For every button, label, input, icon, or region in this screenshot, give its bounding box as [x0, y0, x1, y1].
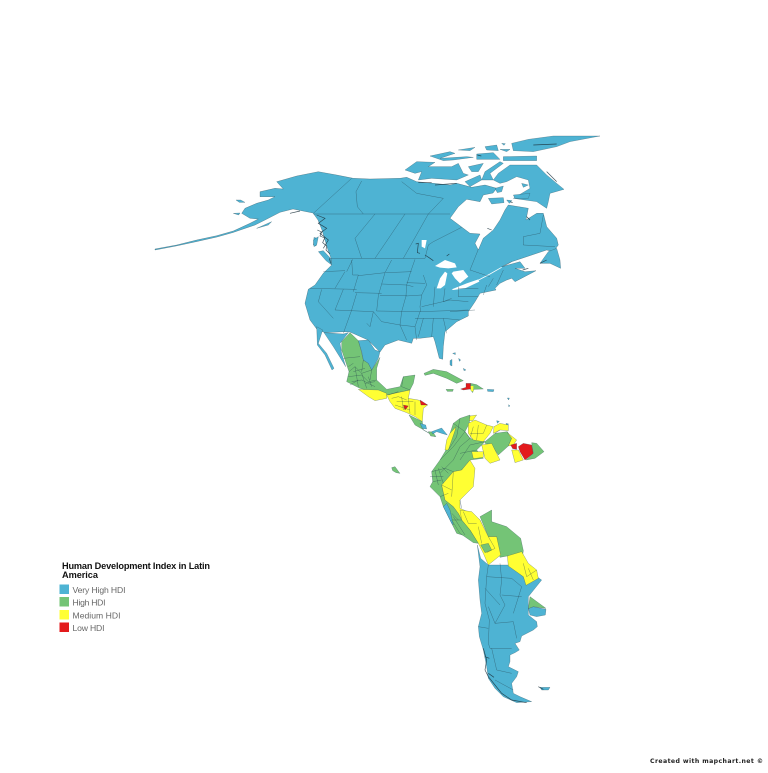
map: northern South America [430, 415, 544, 542]
Costa Rica very high HDI [420, 423, 427, 429]
Colombia Guajira yellow [469, 415, 477, 421]
Cuba [424, 369, 463, 383]
Colombia south-east yellow [472, 452, 483, 459]
Mexico high HDI states [342, 333, 415, 395]
map: Mexico and Central America [342, 333, 435, 437]
Suriname west yellow [512, 450, 523, 463]
Manitoba lake details [416, 243, 547, 270]
legend item: low [60, 622, 104, 633]
southern cone borders [453, 512, 537, 690]
legend title: Human Development Index in Latin [62, 561, 210, 571]
legend item: low: Low HDI [72, 623, 104, 633]
Haida Gwaii [313, 237, 317, 246]
Venezuela Bolivar green [485, 432, 512, 455]
Guyana low HDI spot [511, 443, 517, 449]
Suriname low HDI [518, 443, 533, 460]
Lima very high HDI [443, 503, 453, 525]
legend [60, 561, 210, 633]
Mexico north very high HDI states [358, 340, 380, 370]
Peru coast south green [452, 520, 478, 543]
Mexico south medium HDI [358, 389, 387, 401]
Great Lakes [422, 240, 479, 290]
Vancouver Island [318, 251, 332, 265]
Panama [432, 428, 447, 435]
Peru south and Bolivia Altiplano yellow [460, 510, 501, 565]
Venezuela east yellow [493, 423, 508, 433]
Venezuela Amazonas yellow [482, 443, 500, 463]
Guatemala, Belize and Honduras medium HDI [387, 390, 428, 422]
Dominican Republic yellow [471, 386, 473, 392]
Pacific northwest islands and Alaska islands [313, 230, 332, 265]
map: South America southern cone [452, 510, 550, 703]
Galapagos [392, 467, 400, 473]
fjord details [317, 230, 331, 263]
Bahamas and Caribbean specks [450, 353, 510, 426]
Jamaica [446, 389, 453, 391]
state and province borders [310, 178, 555, 340]
Falkland Islands [540, 687, 550, 690]
map: Caribbean [392, 353, 510, 473]
legend item: high: High HDI [72, 598, 106, 608]
Rio Grande green [528, 597, 546, 609]
Colombia, Ecuador and Peru borders [430, 418, 500, 540]
Tierra del Fuego and Chile fjords [483, 648, 543, 703]
Venezuela yellow [468, 420, 493, 442]
Guyana yellow [507, 433, 517, 446]
Bolivia high HDI [480, 510, 523, 563]
credit line: Created with mapchart.net © [650, 757, 763, 765]
Paraguay medium HDI [507, 552, 538, 585]
Guatemala low HDI spot [403, 405, 408, 410]
eastern Canada and eastern United States water features [416, 240, 561, 290]
Baja California [317, 327, 334, 370]
Colombia, Ecuador and Peru coast green [430, 415, 485, 538]
map: Baja California and Sonora [317, 327, 348, 370]
arctic dark strait details [418, 144, 557, 230]
legend item: very high: Very High HDI [72, 585, 126, 595]
Peru Loreto and highlands yellow [442, 460, 488, 542]
Nicaragua and Costa Rica [409, 415, 435, 437]
Banks and Victoria islands [405, 162, 468, 180]
Argentina and Chile very high HDI [477, 545, 542, 703]
Haiti [461, 383, 471, 390]
St Lawrence river [479, 267, 502, 280]
Sonora [324, 333, 348, 367]
legend title: America [62, 570, 99, 580]
Newfoundland [540, 248, 561, 268]
smaller arctic islands [430, 136, 600, 204]
legend item: high [60, 597, 106, 608]
map: Canada, United States and Alaska landmass [155, 172, 558, 359]
Baffin Island [493, 165, 564, 208]
Honduras Mosquitia low HDI [420, 400, 428, 405]
Dominican Republic [471, 383, 483, 393]
Panama green [428, 432, 436, 437]
arctic archipelago and Baffin Island [405, 136, 600, 230]
Central Mexico and Central America borders [343, 357, 415, 415]
Colombia Pacific yellow [445, 427, 456, 450]
legend item: medium: Medium HDI [72, 610, 120, 620]
Bolivia green inset [481, 543, 492, 553]
south-east Alaska islands detail [290, 211, 328, 248]
Alaska offshore islands [233, 200, 318, 247]
French Guiana high HDI [526, 443, 544, 460]
Uruguay [528, 607, 546, 617]
Puerto Rico [487, 389, 494, 392]
